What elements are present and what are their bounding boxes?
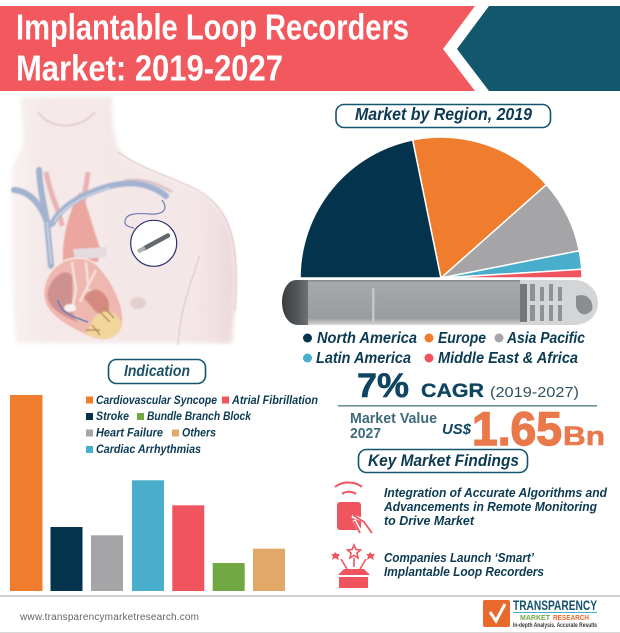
market value statistic xyxy=(350,402,605,455)
legend item: Latin America: Latin America xyxy=(316,350,411,367)
heart left chamber xyxy=(47,272,78,322)
legend item: Bundle Branch Block: Bundle Branch Block xyxy=(147,411,252,423)
bar: Others xyxy=(253,549,285,591)
legend item: Asia Pacific: Asia Pacific xyxy=(506,330,585,347)
heart lead xyxy=(58,300,88,322)
heart apex xyxy=(86,311,122,339)
aorta xyxy=(63,192,100,262)
nipple xyxy=(130,297,146,309)
bar: Cardiac Arrhythmias xyxy=(132,480,164,591)
bar: Stroke xyxy=(50,527,82,591)
heading: indication xyxy=(108,360,206,384)
legend item: Cardiovascular Syncope: Cardiovascular Syncope xyxy=(96,395,218,407)
finding: algorithms and remote monitoring: Advancements in Remote Monitoring xyxy=(383,500,597,514)
legend item: North America: North America xyxy=(317,330,417,347)
heart right chamber xyxy=(84,290,109,314)
legend item: Cardiac Arrhythmias: Cardiac Arrhythmias xyxy=(96,444,201,456)
slice: North America xyxy=(300,140,441,278)
header banner xyxy=(0,6,620,91)
heading: key market findings: Key Market Findings xyxy=(368,452,519,470)
market value statistic: 2027 xyxy=(350,426,381,442)
finding: algorithms and remote monitoring: to Drive Market xyxy=(384,514,475,528)
veins xyxy=(14,170,166,266)
logo: Transparency Market Research: MARKET xyxy=(520,613,550,622)
pie chart: market by region xyxy=(300,137,582,278)
shoulder contour xyxy=(118,152,236,345)
slice: Latin America xyxy=(441,251,582,278)
bar: Cardiovascular Syncope xyxy=(10,395,42,591)
legend item: Middle East & Africa: Middle East & Africa xyxy=(438,350,578,367)
legend: indications xyxy=(86,395,318,456)
torso xyxy=(12,97,236,343)
title ribbon xyxy=(0,6,475,91)
chin shadow xyxy=(38,112,95,126)
shoulder shading xyxy=(178,186,234,342)
finding: smart recorders: Implantable Loop Recorders xyxy=(384,565,544,579)
device head xyxy=(520,280,598,325)
icon: remote monitoring xyxy=(335,482,372,533)
collarbone xyxy=(125,180,172,192)
CAGR statistic: 7% xyxy=(357,367,409,405)
heart white valve xyxy=(64,304,76,312)
market value statistic: Market Value xyxy=(350,411,437,427)
CAGR statistic xyxy=(357,367,579,405)
heart papillary detail xyxy=(86,307,114,335)
device image: loop recorder xyxy=(282,280,598,325)
icon: product launch box xyxy=(331,545,375,588)
bar: Heart Failure xyxy=(91,535,123,591)
lead wire xyxy=(125,200,165,228)
device dark cap xyxy=(282,280,308,325)
legend item: Heart Failure: Heart Failure xyxy=(96,428,164,440)
vein highlight xyxy=(47,188,110,264)
heading: indication: Indication xyxy=(124,363,190,380)
title: Implantable Loop Recorders xyxy=(16,6,409,48)
website url: www.transparencymarketresearch.com xyxy=(19,612,199,623)
device seam xyxy=(372,288,374,324)
logo: Transparency Market Research xyxy=(483,597,597,629)
legend item: Atrial Fibrillation: Atrial Fibrillation xyxy=(231,395,318,407)
slice: Asia Pacific xyxy=(441,185,579,278)
finding: algorithms and remote monitoring: Integration of Accurate Algorithms and xyxy=(384,486,607,500)
finding: smart recorders xyxy=(384,551,544,579)
CAGR statistic: (2019-2027) xyxy=(490,385,579,401)
recorder inset xyxy=(131,220,177,266)
bar: Atrial Fibrillation xyxy=(172,505,204,591)
footer xyxy=(0,595,620,633)
slice: Europe xyxy=(413,137,546,278)
market value statistic: US$ xyxy=(442,421,472,438)
CAGR statistic: CAGR xyxy=(421,381,484,402)
carotid arteries xyxy=(46,172,88,226)
title: Market: 2019-2027 xyxy=(16,48,283,88)
legend item: Others: Others xyxy=(182,428,216,440)
finding: smart recorders: Companies Launch ‘Smart’ xyxy=(384,551,534,565)
heart septum xyxy=(72,262,98,310)
title xyxy=(16,6,409,88)
heart xyxy=(44,258,123,339)
legend: regions xyxy=(303,330,585,367)
legend item: Stroke: Stroke xyxy=(96,411,130,423)
slice: Middle East & Africa xyxy=(441,269,582,278)
legend item: Europe: Europe xyxy=(438,330,486,347)
bar: Bundle Branch Block xyxy=(213,563,245,591)
anatomy illustration: chest with heart and implanted recorder xyxy=(12,97,236,345)
logo: Transparency Market Research: RESEARCH xyxy=(553,613,589,622)
bar chart: indication xyxy=(10,395,285,591)
device body xyxy=(300,280,525,325)
recorder miniature xyxy=(138,236,168,252)
market value statistic: Bn xyxy=(563,421,605,451)
market value statistic: 1.65 xyxy=(472,402,562,455)
device head pattern xyxy=(520,284,592,322)
teal ribbon xyxy=(457,6,620,91)
finding: algorithms and remote monitoring xyxy=(383,486,607,528)
pulmonary band xyxy=(73,247,107,260)
heading: market by region: Market by Region, 2019 xyxy=(355,104,532,124)
